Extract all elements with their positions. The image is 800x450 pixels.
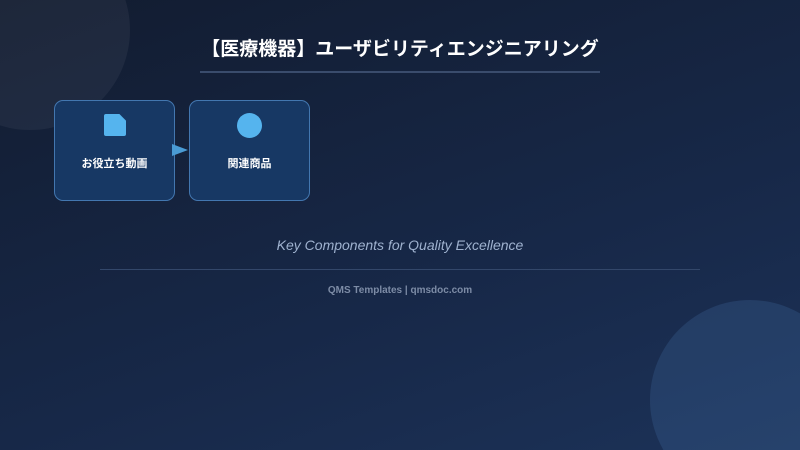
label: お役立ち動画 (82, 158, 148, 170)
arrow (172, 144, 188, 156)
subtitle: Key Components for Quality Excellence (277, 237, 523, 253)
label: 関連商品 (228, 158, 272, 170)
card: 関連商品 (189, 100, 310, 201)
decorative circle top-left (0, 0, 130, 130)
footer: QMS Templates | qmsdoc.com (328, 285, 472, 296)
card: お役立ち動画 (54, 100, 175, 201)
icon: circle (237, 113, 262, 138)
title: 【医療機器】ユーザビリティエンジニアリング (201, 39, 599, 60)
icon: document (104, 114, 126, 136)
decorative circle bottom-right (650, 300, 800, 450)
